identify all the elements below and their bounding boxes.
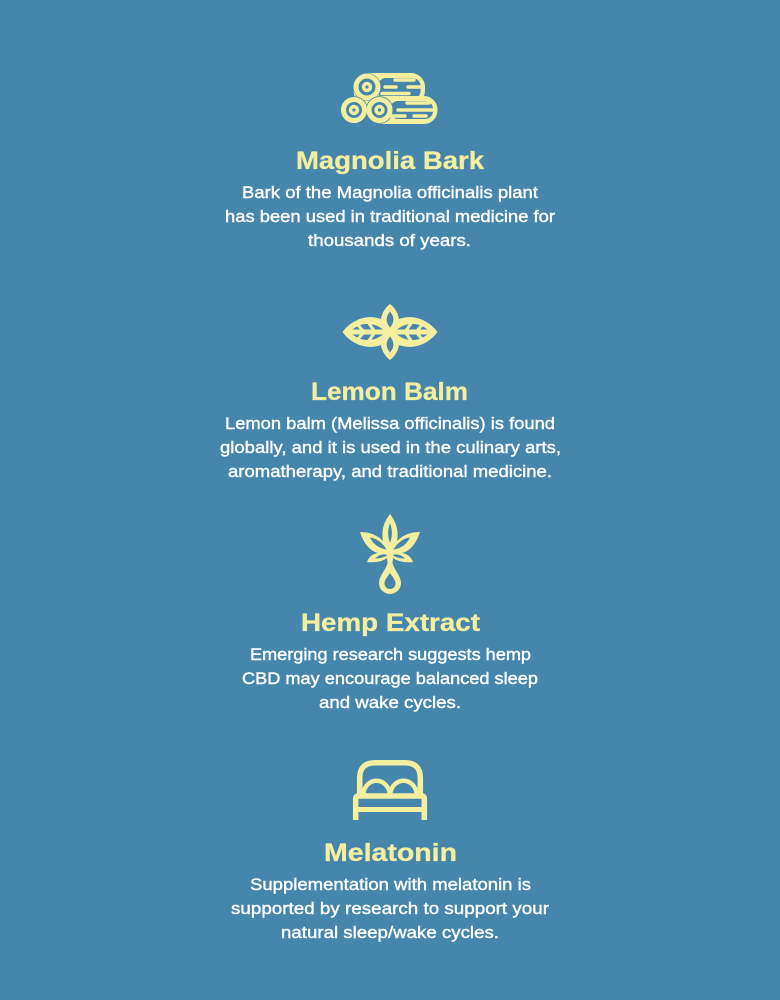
text block xyxy=(242,645,538,712)
heading: Hemp Extract xyxy=(301,609,481,637)
section: Melatonin xyxy=(231,763,549,942)
heading: Melatonin xyxy=(324,839,457,867)
text block: Lemon balm (Melissa officinalis) is found xyxy=(225,414,555,433)
text block: Bark of the Magnolia officinalis plant xyxy=(242,183,538,202)
text block: CBD may encourage balanced sleep xyxy=(242,669,538,688)
text block: has been used in traditional medicine for xyxy=(225,207,555,226)
text block: natural sleep/wake cycles. xyxy=(281,923,499,942)
heading: Lemon Balm xyxy=(311,378,468,406)
icon: hemp leaf with drop xyxy=(360,514,420,594)
icon: leaves xyxy=(342,304,438,360)
text block: aromatherapy, and traditional medicine. xyxy=(228,462,552,481)
text block xyxy=(225,183,555,250)
text block: supported by research to support your xyxy=(231,899,549,918)
heading: Magnolia Bark xyxy=(296,147,484,175)
text block xyxy=(231,875,549,942)
icon: bed xyxy=(356,763,424,820)
text block xyxy=(220,414,561,481)
text block: Emerging research suggests hemp xyxy=(250,645,531,664)
section: Magnolia Bark xyxy=(225,73,555,250)
text block: and wake cycles. xyxy=(319,693,461,712)
section: Hemp Extract xyxy=(242,514,538,712)
section: Lemon Balm xyxy=(220,304,561,481)
text block: thousands of years. xyxy=(308,231,471,250)
text block: globally, and it is used in the culinary arts, xyxy=(220,438,561,457)
icon: logs xyxy=(340,73,438,124)
text block: Supplementation with melatonin is xyxy=(250,875,531,894)
